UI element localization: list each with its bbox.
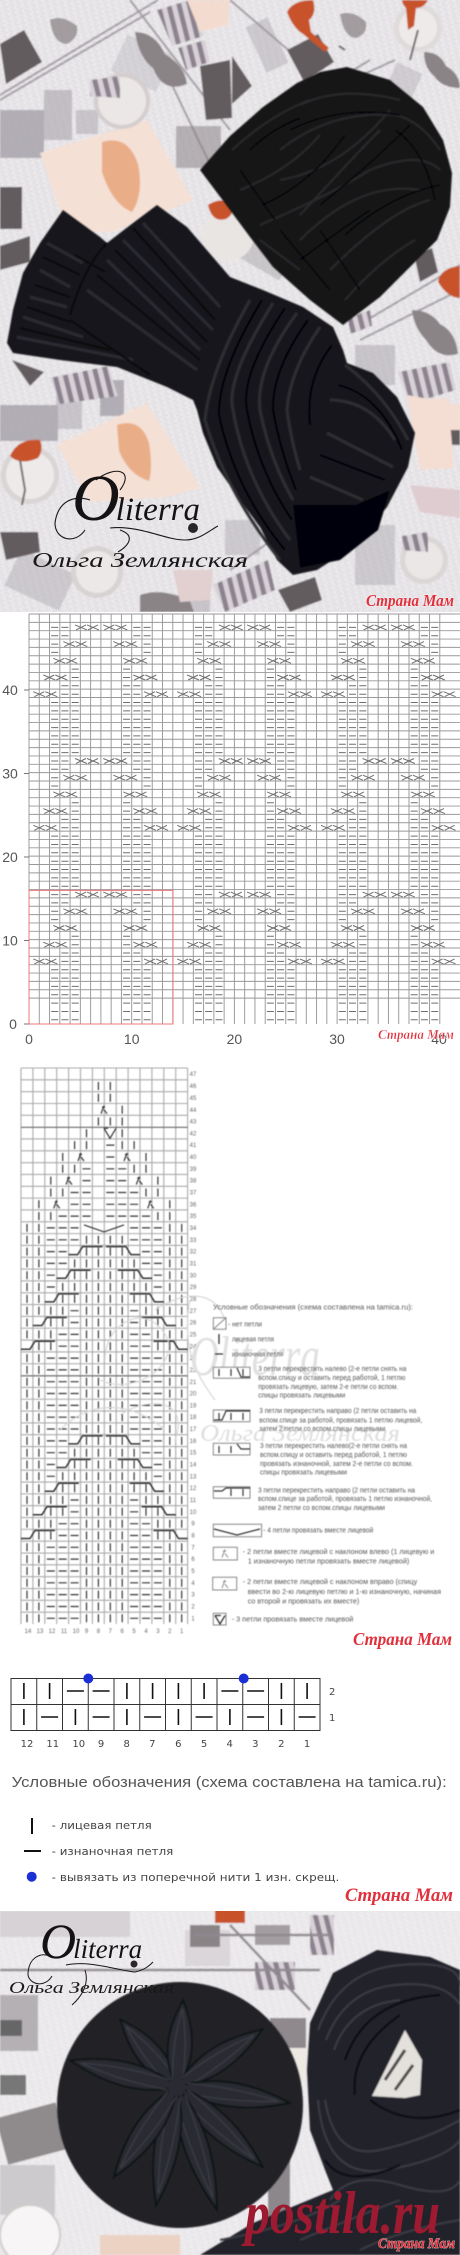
row numbers: 21 (190, 1380, 197, 1386)
y axis labels: 20 (2, 849, 18, 865)
knot ridges (205, 300, 408, 560)
row labels (329, 1687, 335, 1724)
red pipes (287, 0, 329, 52)
row numbers: 16 (190, 1439, 197, 1445)
legend text lines: - 4 петли провязать вместе лицевой (263, 1526, 373, 1534)
signature: Oliterra: Oliterra (72, 462, 200, 535)
y axis labels (2, 682, 29, 1032)
scarf (200, 1950, 460, 2255)
legend text lines: - 2 петли вместе лицевой с наклоном вправо (спицу (243, 1577, 417, 1586)
row numbers: 44 (190, 1108, 197, 1114)
row numbers: 14 (190, 1462, 197, 1468)
row numbers: 9 (191, 1522, 195, 1528)
watermark: Страна Мам (378, 2236, 455, 2252)
row numbers: 7 (191, 1546, 195, 1552)
legend text lines: затем 2 петли со вспом.спицы лицевыми (259, 1424, 385, 1433)
legend text lines: 3 петли перекрестить направо (2 петли оставить на (258, 1486, 416, 1494)
legend: knit: - лицевая петля (52, 1819, 152, 1832)
legend text lines: спицы провязать лицевыми (260, 1468, 347, 1476)
row numbers: 28 (190, 1297, 197, 1303)
column labels: 8 (124, 1739, 130, 1750)
plates (94, 73, 150, 129)
column numbers: 14 (25, 1629, 32, 1635)
legend text lines (228, 1320, 441, 1624)
row numbers: 46 (190, 1084, 197, 1090)
striped sheets (50, 0, 456, 612)
chart grid (21, 1068, 188, 1624)
chart 3: two-row rib chart (10, 1674, 335, 1750)
legend text lines: со второй и провязать их вместе) (248, 1596, 360, 1606)
signature: author name: Ольга Землянская (32, 548, 248, 572)
watermark signature over chart: Ольга Землянская (200, 1421, 400, 1447)
column numbers: 11 (61, 1629, 68, 1635)
column numbers: 2 (168, 1629, 172, 1635)
legend text lines: 3 петли перекрестить налево(2-е петли снять на (260, 1441, 408, 1450)
row numbers: 36 (190, 1202, 197, 1208)
legend: increase: - вывязать из поперечной нити 1 изн. скрещ. (52, 1871, 339, 1884)
watermark signature over chart (60, 1296, 400, 1447)
column numbers (25, 1629, 184, 1635)
x axis labels: 20 (227, 1031, 242, 1047)
column labels: 7 (149, 1739, 155, 1750)
row numbers: 24 (190, 1344, 197, 1350)
row numbers: 3 (191, 1592, 195, 1598)
row numbers: 17 (190, 1427, 197, 1433)
signature (32, 462, 248, 572)
cuff ridges (17, 223, 220, 370)
legend text lines: провязать изнаночной, затем 2-е петли со вспом. (260, 1459, 413, 1468)
row numbers: 31 (190, 1262, 197, 1268)
red repeat box (29, 890, 173, 1024)
row numbers: 29 (190, 1285, 197, 1291)
legend for chart 3 (12, 1775, 447, 1884)
y axis labels: 0 (9, 1016, 17, 1032)
row labels: 2 (329, 1687, 335, 1698)
column numbers: 13 (37, 1629, 44, 1635)
legend text lines: лицевая петля (232, 1334, 274, 1344)
row numbers: 45 (190, 1096, 197, 1102)
row numbers: 23 (190, 1356, 197, 1362)
row numbers: 19 (190, 1404, 197, 1410)
x axis labels: 10 (124, 1031, 140, 1047)
row numbers: 47 (190, 1072, 197, 1078)
legend text lines: спицы провязать лицевыми (258, 1390, 345, 1400)
column labels: 12 (21, 1739, 33, 1750)
legend text lines: провязать лицевую, затем 2-е петли со вспом. (258, 1382, 398, 1391)
row numbers: 2 (191, 1604, 195, 1610)
watermark: Страна Мам (353, 1629, 452, 1649)
watermark: Страна Мам (378, 1028, 454, 1043)
row numbers: 18 (190, 1415, 197, 1421)
legend text lines: - 3 петли провязать вместе лицевой (232, 1614, 353, 1624)
y axis labels: 10 (2, 932, 18, 948)
column labels: 9 (98, 1739, 104, 1750)
legend: purl: - изнаночная петля (52, 1845, 173, 1858)
signature (9, 1913, 174, 2005)
row numbers: 34 (190, 1226, 197, 1232)
icon: blue dot (27, 1872, 37, 1882)
scarf opening (372, 2030, 422, 2098)
row numbers: 41 (190, 1143, 197, 1149)
column numbers: 12 (49, 1629, 56, 1635)
column numbers: 9 (85, 1629, 89, 1635)
x axis labels: 0 (25, 1031, 33, 1047)
x axis labels: 30 (329, 1031, 345, 1047)
dark inner fold (293, 490, 390, 568)
legend text lines: 3 петли перекрестить направо (2 петли оставить на (259, 1406, 417, 1415)
row numbers: 30 (190, 1274, 197, 1280)
x axis labels (25, 1031, 447, 1047)
newspaper background (0, 1905, 460, 2255)
chart symbols (21, 1082, 188, 1622)
column labels: 5 (201, 1739, 207, 1750)
chart 1: cable pattern grid (2, 614, 460, 1047)
legend text lines: - нет петли (228, 1320, 262, 1328)
row numbers: 1 (191, 1616, 195, 1622)
row numbers: 38 (190, 1178, 197, 1184)
column labels: 10 (72, 1739, 85, 1750)
row numbers: 15 (190, 1450, 197, 1456)
column labels: 4 (227, 1739, 233, 1750)
row numbers (190, 1072, 197, 1622)
column numbers: 8 (97, 1629, 101, 1635)
signature: name: Ольга Землянская (9, 1978, 174, 1997)
icon: purl stitch (24, 1850, 41, 1852)
row numbers: 42 (190, 1132, 197, 1138)
legend text lines: изнаночная петля (232, 1350, 283, 1358)
row numbers: 25 (190, 1332, 197, 1338)
column labels: 11 (46, 1739, 59, 1750)
row numbers: 32 (190, 1250, 197, 1256)
legend text lines: 1 изнаночную петли провязать вместе лицевой) (248, 1556, 410, 1566)
panel: photo of beret and scarf (0, 1911, 460, 2255)
row numbers: 8 (191, 1534, 195, 1540)
row numbers: 5 (191, 1569, 195, 1575)
grid (11, 1678, 320, 1730)
y axis labels: 30 (2, 766, 18, 782)
column labels: 6 (175, 1739, 181, 1750)
row numbers: 10 (190, 1510, 197, 1516)
row numbers: 4 (191, 1581, 195, 1587)
column numbers: 5 (132, 1629, 136, 1635)
row numbers: 22 (190, 1368, 197, 1374)
column numbers: 3 (156, 1629, 160, 1635)
pattern symbols (33, 625, 456, 1020)
icon: knit stitch (31, 1818, 33, 1834)
hat (200, 67, 452, 325)
pink newspaper sheets (40, 120, 193, 232)
row numbers: 12 (190, 1486, 197, 1492)
row numbers: 13 (190, 1474, 197, 1480)
column labels: 3 (252, 1739, 258, 1750)
text columns (0, 17, 423, 612)
newspaper background collage (0, 0, 460, 617)
row numbers: 35 (190, 1214, 197, 1220)
row numbers: 27 (190, 1309, 197, 1315)
legend text lines: - 2 петли вместе лицевой с наклоном влево (1 лицевую и (243, 1547, 434, 1556)
row numbers: 37 (190, 1190, 197, 1196)
watermark signature over chart: Oliterra (190, 1326, 320, 1388)
column labels (21, 1739, 310, 1750)
signature: Oliterra: Oliterra (40, 1913, 142, 1969)
column numbers: 10 (73, 1629, 80, 1635)
row numbers: 43 (190, 1120, 197, 1126)
y axis labels: 40 (2, 682, 18, 698)
x axis labels: 40 (431, 1031, 447, 1047)
column numbers: 6 (121, 1629, 125, 1635)
column numbers: 1 (180, 1629, 184, 1635)
row labels: 1 (329, 1713, 335, 1724)
column labels: 2 (278, 1739, 284, 1750)
column labels: 1 (304, 1739, 310, 1750)
scarf (7, 205, 415, 575)
knit and purl symbols (24, 1683, 316, 1725)
column numbers: 4 (144, 1629, 148, 1635)
grid lines (29, 614, 460, 1024)
row numbers: 20 (190, 1392, 197, 1398)
dark newspaper images (0, 30, 460, 612)
blue dots (83, 1674, 249, 1684)
row numbers: 11 (190, 1498, 197, 1504)
column numbers: 7 (109, 1629, 113, 1635)
legend text lines: ввести во 2-ю лицевую петлю и 1-ю изнаночную, начиная (248, 1587, 441, 1596)
row numbers: 40 (190, 1155, 197, 1161)
beret star leaves (67, 1999, 292, 2213)
row numbers: 6 (191, 1557, 195, 1563)
row numbers: 33 (190, 1238, 197, 1244)
row numbers: 26 (190, 1320, 197, 1326)
chart 2: crown decrease chart with legend (20, 1067, 452, 1649)
legend heading: Условные обозначения (схема составлена на tamica.ru): (12, 1775, 447, 1791)
legend text lines: 3 петли перекрестить налево (2-е петли снять на (258, 1364, 407, 1373)
legend heading: Условные обозначения (схема составлена на tamica.ru): (213, 1302, 413, 1312)
legend text lines: затем 2 петли со вспом.спицы лицевыми (258, 1503, 385, 1512)
beret (57, 1982, 303, 2228)
row numbers: 39 (190, 1167, 197, 1173)
legend text lines: вспом.спице за работой, провязать 1 петлю лицевой, (259, 1416, 422, 1424)
legend icons (213, 1318, 262, 1625)
torn paper edges (0, 0, 460, 570)
legend text lines: вспом.спицу и оставить перед работой, 1 петлю (260, 1450, 407, 1459)
legend text lines: вспом.спицу и оставить перед работой, 1 петлю (258, 1373, 406, 1382)
legend text lines: вспом.спице за работой, провязать 1 петлю изнаночной, (258, 1494, 432, 1503)
